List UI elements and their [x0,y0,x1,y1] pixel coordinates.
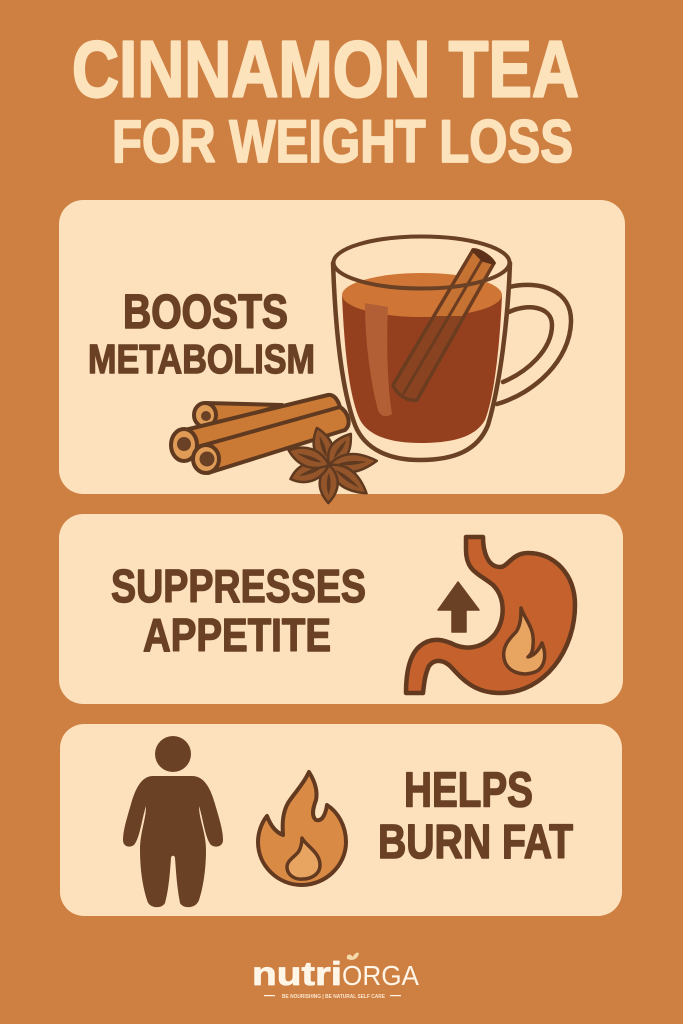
panel: suppresses appetite [59,514,623,704]
title: CINNAMON TEA [72,24,579,114]
icon: cinnamon sticks [171,395,349,473]
icon: cinnamon tea mug [333,236,571,460]
heading: suppresses appetite: SUPPRESSES [111,560,366,612]
heading: suppresses appetite [111,560,366,661]
heading: boosts metabolism [88,286,315,382]
panel: helps burn fat [60,724,622,916]
heading: helps burn fat [378,764,573,869]
icon: person silhouette [123,736,223,907]
heading: boosts metabolism: BOOSTS [123,286,288,339]
title: FOR WEIGHT LOSS [112,108,573,175]
tagline: BE NOURISHING | BE NATURAL SELF CARE [282,994,386,1000]
title [72,24,579,175]
logo: nutriORGA: nutri [252,955,342,992]
heading: helps burn fat: HELPS [404,764,533,818]
icon: stomach with flame [406,537,575,693]
logo: nutriORGA: ORGA [342,960,419,991]
icon: up arrow [438,582,479,632]
icon: logo leaf [347,953,359,960]
icon: star anise [286,425,378,503]
panel: boosts metabolism [59,200,625,503]
heading: helps burn fat: BURN FAT [378,816,573,869]
logo: nutriORGA [252,953,419,1000]
heading: suppresses appetite: APPETITE [143,609,331,661]
icon: small flame [504,608,545,674]
heading: boosts metabolism: METABOLISM [88,336,315,382]
icon: flame [258,772,346,885]
